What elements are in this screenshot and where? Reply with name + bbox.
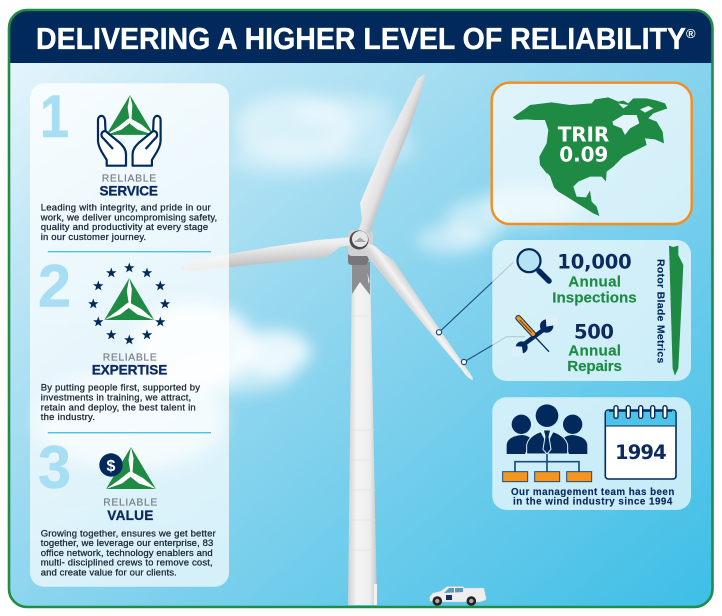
tower	[348, 262, 377, 605]
text: value description: together, we leverage our enterprise, 83	[41, 538, 213, 549]
metric: TRIR	[558, 123, 609, 167]
leader lines	[436, 262, 525, 365]
heading: value: VALUE	[107, 508, 153, 523]
panel: rotor blade metrics	[492, 240, 691, 381]
panel: management experience	[492, 397, 691, 510]
map of North America	[513, 97, 667, 216]
text: management caption	[511, 487, 674, 508]
metric: annual inspections: Inspections	[552, 290, 637, 307]
text: value description	[41, 528, 216, 579]
heading: service: SERVICE	[100, 184, 158, 199]
text: service description	[40, 203, 217, 243]
label: reliable: RELIABLE	[103, 498, 157, 509]
panel background	[492, 83, 692, 224]
metric: annual inspections	[552, 251, 637, 307]
icon: calendar 1994: 1994	[615, 441, 667, 464]
title: DELIVERING A HIGHER LEVEL OF RELIABILITY	[36, 22, 686, 56]
title: ®	[686, 26, 696, 41]
wind turbine	[180, 74, 473, 605]
panel: TRIR safety map	[492, 83, 692, 224]
text: expertise description	[41, 383, 200, 423]
text: management caption: in the wind industry since 1994	[513, 497, 673, 508]
label: rotor blade metrics: Rotor Blade Metrics	[654, 259, 666, 363]
icon: wrench and screwdriver	[512, 315, 558, 357]
header bar	[9, 10, 712, 63]
nacelle	[348, 230, 373, 265]
blade: lower right	[364, 243, 473, 380]
section 2: reliable expertise	[38, 253, 200, 423]
service truck	[430, 586, 486, 606]
icon: turbine logo with dollar coin	[99, 447, 156, 489]
panel background	[492, 397, 691, 510]
text: expertise description: retain and deploy, the best talent in	[41, 402, 196, 413]
icon: magnifying glass	[518, 249, 549, 281]
blade: top	[358, 74, 425, 233]
numeral 1: 1	[40, 83, 69, 150]
metric: annual repairs: Repairs	[567, 358, 622, 375]
text: value description: Growing together, ensures we get better	[41, 528, 216, 539]
icon: green rotor blade	[669, 246, 683, 376]
icon: turbine logo in star ring	[88, 262, 170, 344]
text: service description: quality and productivity at every stage	[41, 222, 208, 233]
metric: annual inspections: 10,000	[557, 251, 632, 274]
icon: calendar 1994	[605, 406, 676, 479]
text: service description: Leading with integrity, and pride in our	[41, 203, 211, 214]
heading: expertise: EXPERTISE	[92, 363, 167, 378]
panel background	[30, 83, 229, 587]
blade: left	[180, 237, 352, 271]
text: service description: in our customer journey.	[41, 232, 146, 243]
text: management caption: Our management team has been	[511, 487, 674, 498]
numeral 3: 3	[38, 434, 71, 501]
label: reliable: RELIABLE	[103, 352, 157, 363]
label: reliable: RELIABLE	[102, 174, 156, 185]
text: expertise description: the industry.	[41, 412, 95, 423]
text: expertise description: By putting people first, supported by	[41, 383, 200, 394]
text: value description: multi- disciplined crews to remove cost,	[41, 558, 213, 569]
section 1: reliable service	[40, 83, 217, 243]
metric: annual repairs: Annual	[568, 343, 621, 360]
metric: TRIR: 0.09	[559, 143, 608, 167]
icon: management team org chart	[503, 404, 592, 482]
text: service description: work, we deliver uncompromising safety,	[40, 212, 217, 223]
metric: annual repairs: 500	[574, 320, 614, 343]
icon: turbine logo with dollar coin: $	[107, 458, 116, 475]
metric: annual repairs	[567, 320, 622, 375]
metric: annual inspections: Annual	[568, 274, 621, 291]
hub	[350, 230, 368, 250]
panel: reliability pillars	[30, 83, 229, 587]
text: value description: office network, technology enablers and	[41, 548, 213, 559]
text: value description: and create value for our clients.	[41, 568, 177, 579]
section 3: reliable value	[38, 434, 216, 579]
icon: turbine logo in hands	[98, 95, 161, 166]
metric: TRIR: TRIR	[558, 123, 609, 147]
clouds	[35, 94, 580, 470]
numeral 2: 2	[38, 253, 71, 320]
text: expertise description: investments in training, we attract,	[41, 392, 191, 404]
panel background	[492, 240, 691, 381]
